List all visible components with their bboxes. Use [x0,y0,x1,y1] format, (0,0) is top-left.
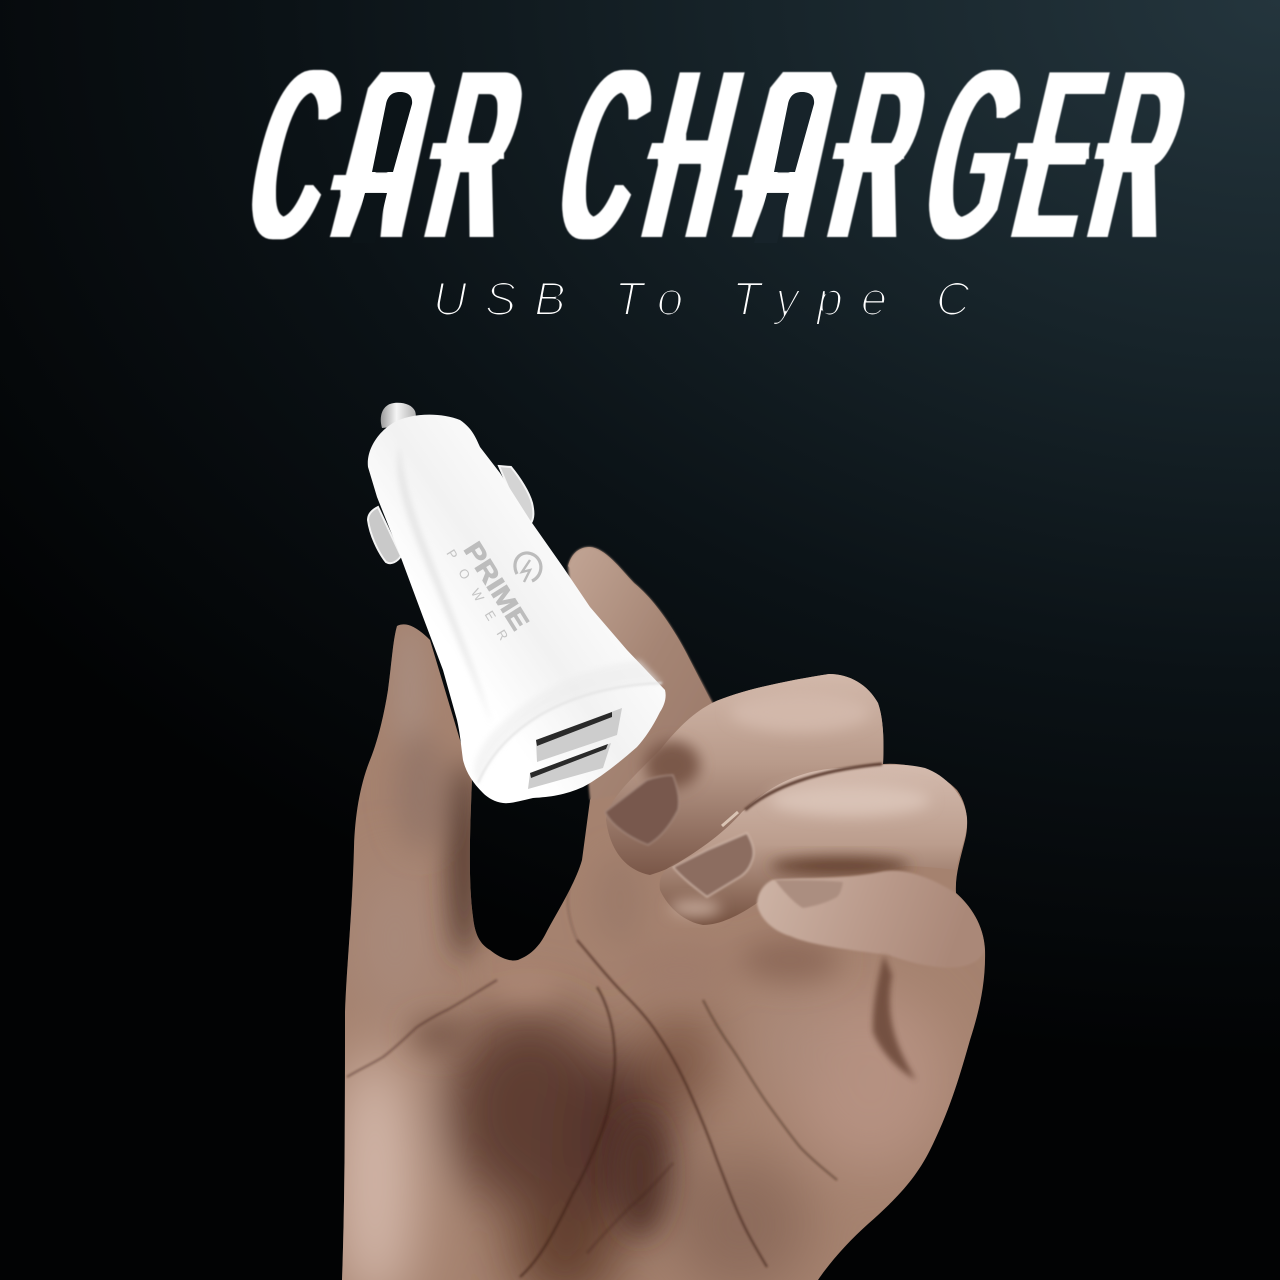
charger tip contact [381,403,416,428]
hand [333,547,985,1280]
logo PRIME: PRIME [458,536,535,635]
nail: middle finger [673,833,754,897]
crease between curled and middle finger [745,764,882,810]
body shading [398,445,492,725]
palm creases [347,860,837,1277]
finger: index behind charger [568,547,714,800]
left spring clip [368,507,401,563]
logo icon [515,553,541,582]
title: CAR CHARGER: CAR CHARGER [227,15,1207,293]
nail: curled finger [605,775,679,845]
finger: ring with nail [757,871,985,1080]
nail: ring finger [775,880,843,908]
knuckle crease shadow [873,955,916,1080]
right spring clip [499,466,533,523]
finger: curled with nail [605,674,883,875]
logo POWER: POWER [443,547,511,643]
finger: middle with nail [660,764,967,925]
front face rim [478,683,662,783]
subtitle: USB To Type C: USB To Type C [433,272,971,325]
palm and wrist shading [333,620,950,1280]
car charger [368,403,666,803]
USB port upper [536,708,622,762]
USB port lower [528,743,611,789]
charger body [368,415,666,803]
glint between fingers [722,812,738,826]
